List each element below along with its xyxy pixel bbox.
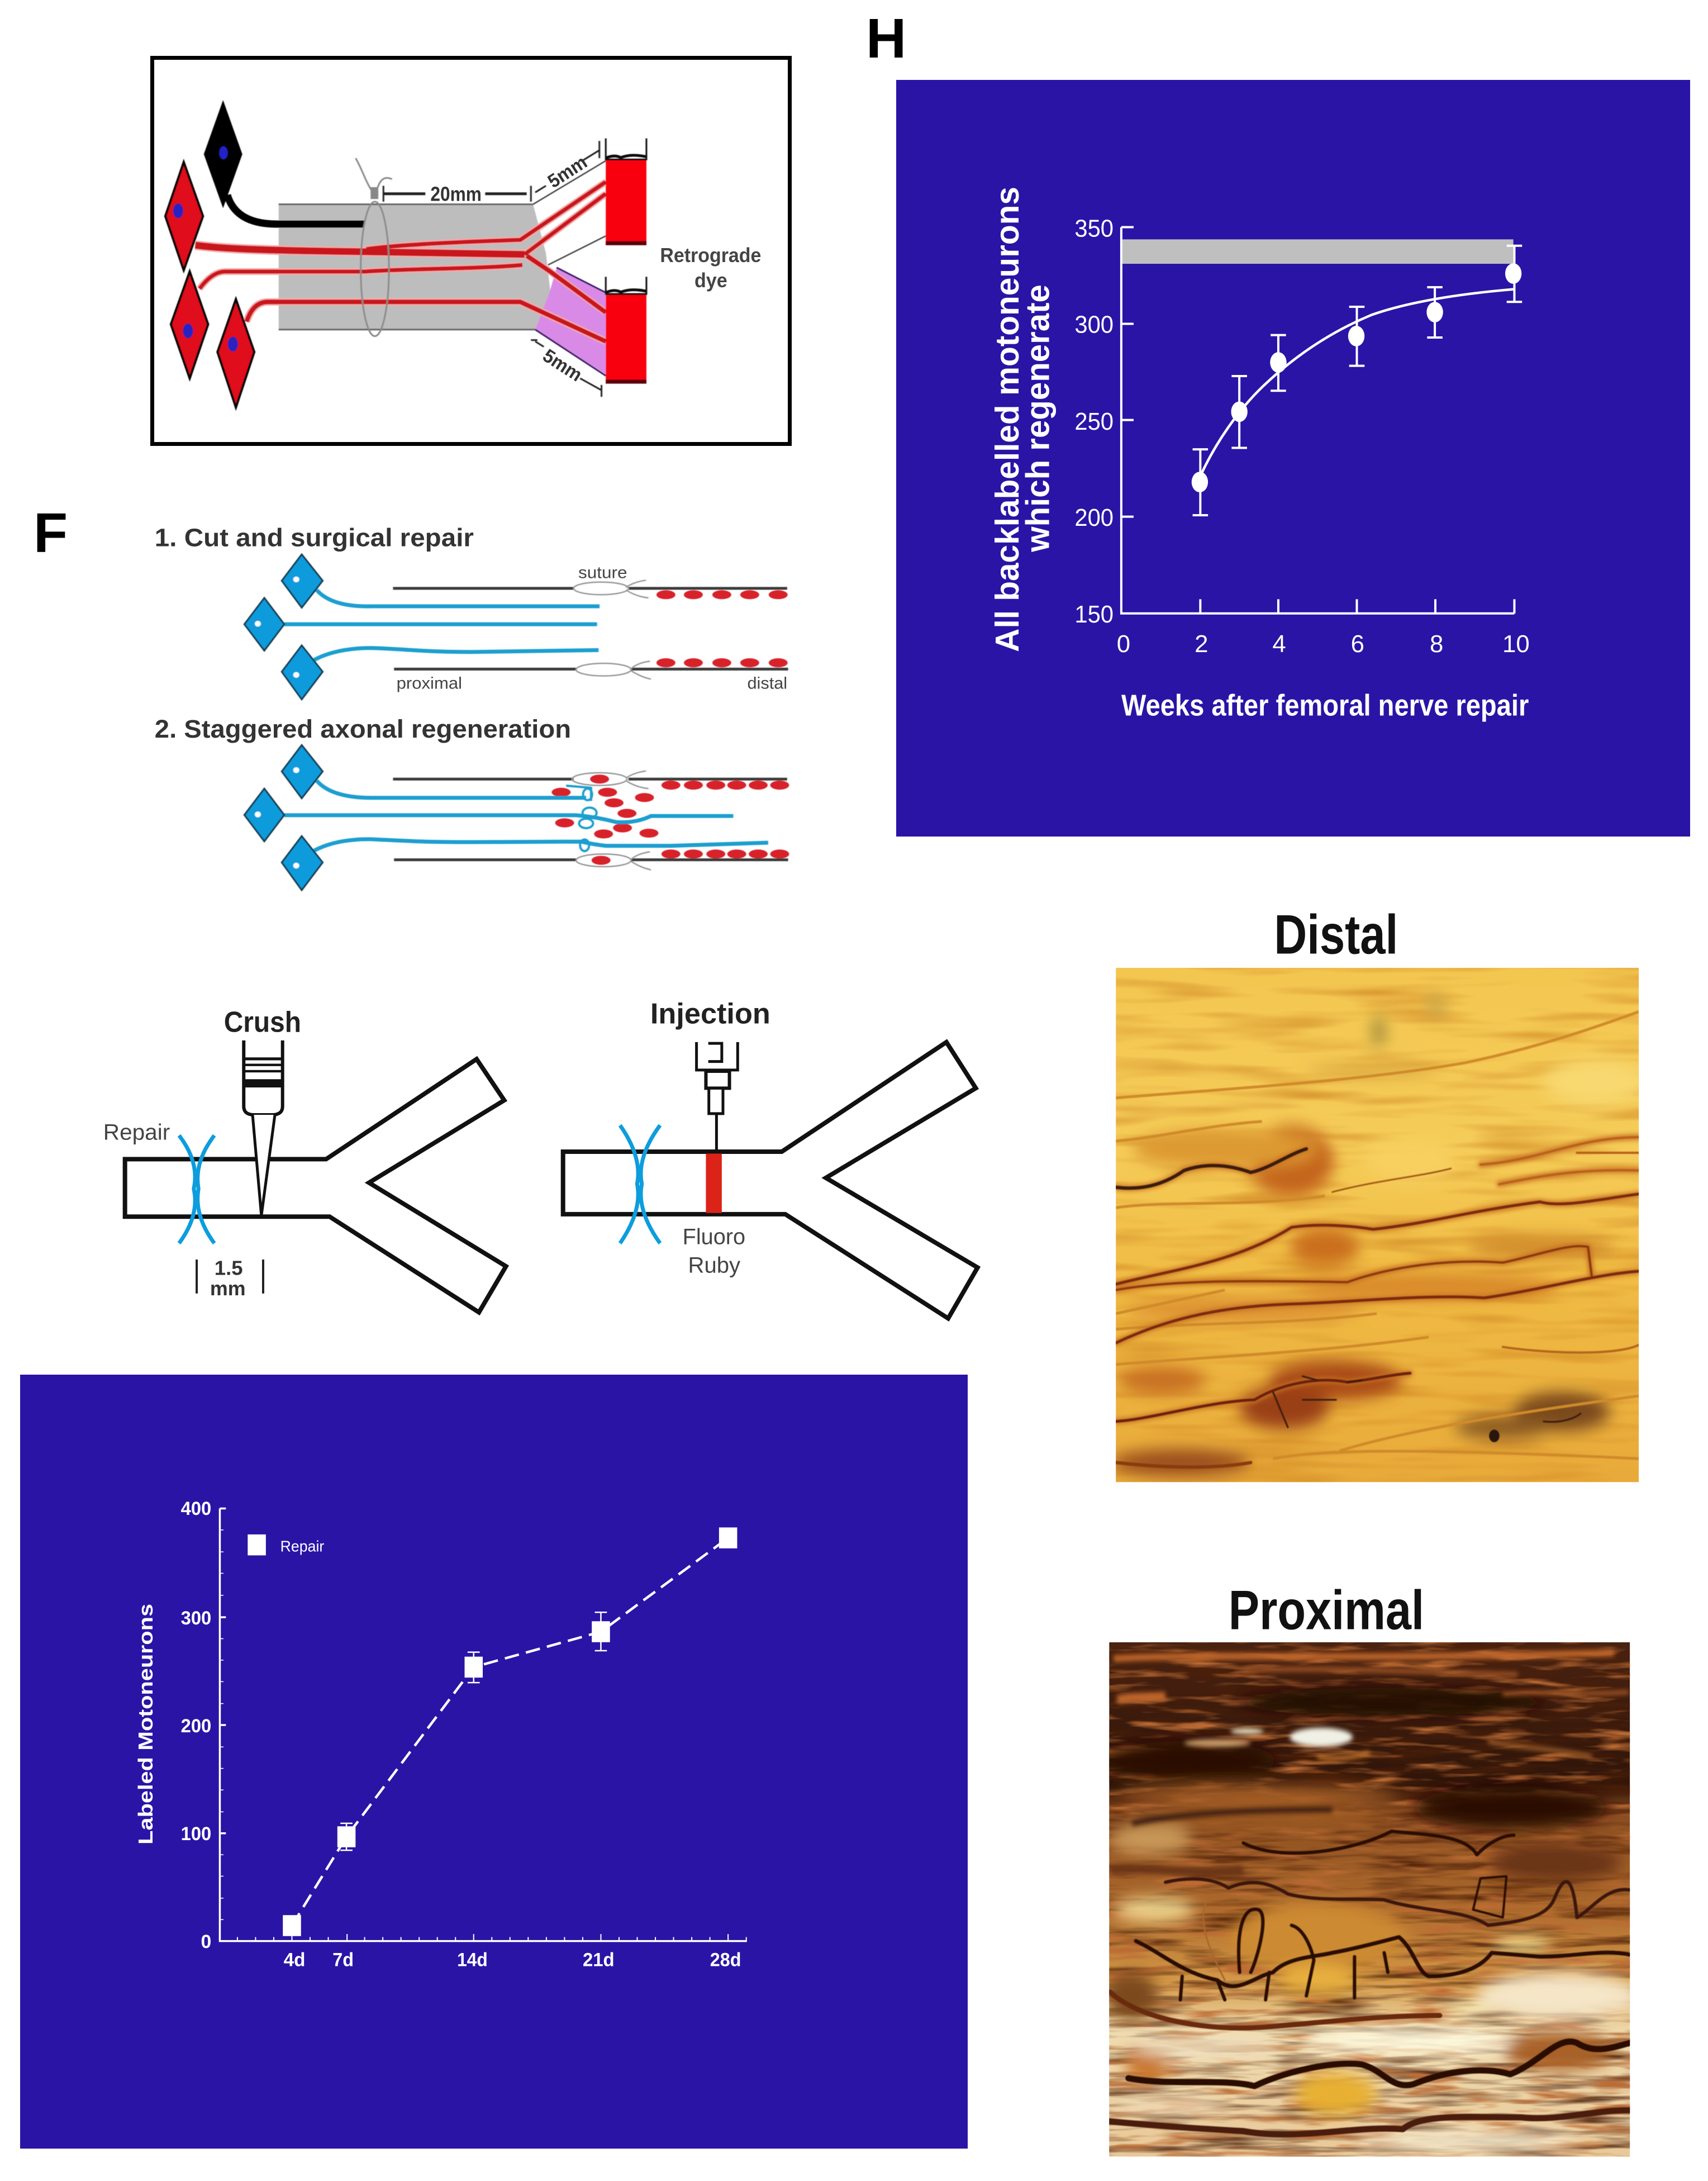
y axis tick labels: 150 xyxy=(1074,601,1114,628)
nerve schematic artwork xyxy=(125,1040,978,1318)
schematic artwork xyxy=(244,554,789,890)
y axis tick labels: 100 xyxy=(181,1823,211,1845)
label: distal: distal xyxy=(747,674,787,692)
y axis tick labels: 350 xyxy=(1074,215,1114,243)
label: suture: suture xyxy=(578,563,627,582)
legend label: Repair xyxy=(280,1537,324,1555)
label: 1.5: 1.5 xyxy=(215,1257,243,1279)
panel: labeled motoneurons chart xyxy=(20,1375,968,2149)
heading: Proximal: Proximal xyxy=(1229,1579,1424,1641)
x axis tick labels: 4 xyxy=(1272,630,1286,658)
heading: panel letter F: F xyxy=(34,502,68,564)
x axis tick labels xyxy=(1117,630,1530,658)
x axis tick labels xyxy=(284,1950,741,1971)
y axis tick labels xyxy=(181,1498,211,1952)
y axis tick labels: 200 xyxy=(181,1716,211,1737)
chart contents xyxy=(988,187,1530,722)
chart background xyxy=(896,80,1690,837)
heading: step 2: 2. Staggered axonal regeneration xyxy=(155,715,571,743)
x axis tick labels: 2 xyxy=(1195,630,1208,658)
photo: distal nerve micrograph xyxy=(1110,968,1647,1482)
panel: staggered axonal regeneration schematic xyxy=(155,524,789,890)
label: Repair: Repair xyxy=(103,1120,170,1145)
heading: Distal: Distal xyxy=(1274,904,1398,966)
y axis title xyxy=(988,187,1057,652)
label: Retrograde: Retrograde xyxy=(660,244,761,267)
heading: Injection: Injection xyxy=(650,997,770,1030)
label: upper 5mm: 5mm xyxy=(544,151,591,192)
panel: distal micrograph with title xyxy=(1110,904,1647,1482)
y axis title: Labeled Motoneurons xyxy=(135,1604,157,1845)
label: proximal: proximal xyxy=(397,674,462,692)
x axis tick labels: 14d xyxy=(457,1950,488,1971)
y axis title: which regenerate xyxy=(1019,284,1057,553)
y axis tick labels: 0 xyxy=(201,1931,211,1952)
label: Ruby: Ruby xyxy=(688,1253,740,1277)
y axis tick labels: 300 xyxy=(1074,311,1114,339)
x axis tick labels: 10 xyxy=(1502,630,1530,658)
panel frame xyxy=(152,58,790,444)
x axis tick labels: 6 xyxy=(1351,630,1364,658)
photo: proximal nerve micrograph xyxy=(1099,1642,1640,2156)
diagram contents xyxy=(165,100,761,407)
x axis tick labels: 28d xyxy=(710,1950,741,1971)
y axis title: All backlabelled motoneurons xyxy=(988,187,1026,652)
panel: H chart of backlabelled motoneurons xyxy=(896,80,1690,837)
x axis tick labels: 21d xyxy=(583,1950,615,1971)
panel: crush and injection schematic xyxy=(103,997,978,1318)
diagram artwork: nerve, neurons, dye wells xyxy=(165,100,646,407)
x axis title: Weeks after femoral nerve repair xyxy=(1121,688,1529,722)
chart contents xyxy=(135,1498,747,1971)
x axis tick labels: 7d xyxy=(332,1950,354,1971)
label: mm: mm xyxy=(210,1277,246,1300)
heading: step 1: 1. Cut and surgical repair xyxy=(155,524,474,552)
label: Fluoro: Fluoro xyxy=(683,1225,745,1249)
y axis tick labels: 300 xyxy=(181,1608,211,1629)
chart plot: axes, dashed line, markers xyxy=(220,1508,747,1941)
label: 20mm: 20mm xyxy=(430,183,482,206)
label: lower 5mm: 5mm xyxy=(539,345,586,386)
chart background xyxy=(20,1375,968,2149)
x axis tick labels: 8 xyxy=(1430,630,1443,658)
heading: Crush: Crush xyxy=(224,1006,301,1038)
heading: panel letter H: H xyxy=(866,7,906,70)
chart plot: axes, reference band, curve, points xyxy=(1121,227,1522,614)
panel: retrograde dye labelling diagram xyxy=(152,58,790,444)
label: dye: dye xyxy=(694,269,727,292)
x axis tick labels: 4d xyxy=(284,1950,305,1971)
panel: proximal micrograph with title xyxy=(1099,1579,1640,2156)
y axis tick labels: 250 xyxy=(1074,408,1114,435)
y axis tick labels: 400 xyxy=(181,1498,211,1519)
y axis tick labels xyxy=(1074,215,1114,628)
x axis tick labels: 0 xyxy=(1117,630,1130,658)
y axis tick labels: 200 xyxy=(1074,504,1114,531)
